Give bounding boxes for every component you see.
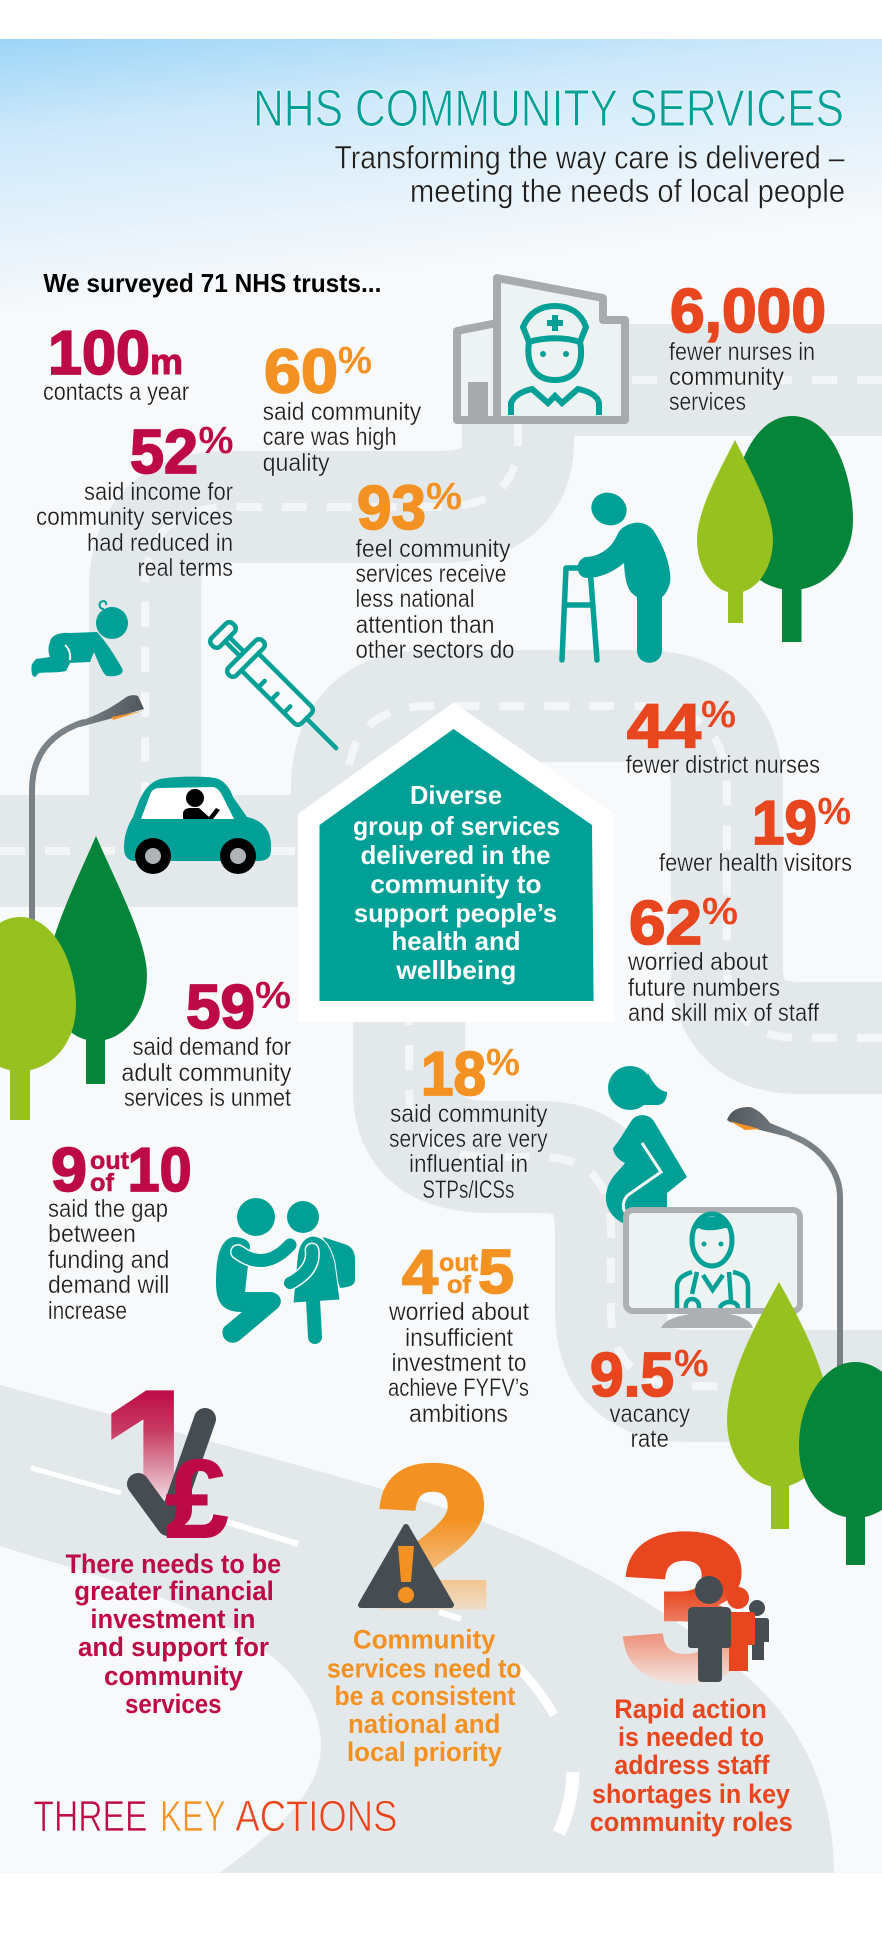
central house panel: delivered in the — [360, 840, 550, 870]
stat: 44% fewer district nurses: fewer district nurses — [626, 751, 820, 779]
stat: 60% high quality: said community — [263, 398, 422, 426]
icon: trees left — [0, 836, 147, 1120]
action 3: staff shortages text: shortages in key — [592, 1779, 790, 1809]
stat: 62% worried about staff — [627, 889, 819, 1027]
stat: 19% fewer health visitors: fewer health visitors — [659, 849, 852, 877]
stat: 6,000 fewer nurses: services — [669, 388, 746, 416]
large bottom road — [0, 1385, 834, 1873]
stat: 6,000 fewer nurses: fewer nurses in — [669, 338, 815, 366]
stat: 6,000 fewer nurses — [669, 277, 826, 416]
stat: 18% very influential: 18 — [421, 1040, 486, 1109]
stat: 59% demand unmet: % — [255, 975, 291, 1017]
icon: trees bottom right — [727, 1282, 882, 1565]
stat: 9.5% vacancy rate: vacancy — [610, 1400, 690, 1428]
stat: 19% fewer health visitors: 19 — [752, 789, 817, 858]
stat: 52% income reduced — [36, 418, 234, 582]
action 1: financial investment text: investment in — [90, 1604, 255, 1634]
stat: 52% income reduced: % — [198, 420, 234, 462]
stat: 6,000 fewer nurses: 6,000 — [670, 277, 826, 346]
icon: syringe — [202, 614, 353, 765]
icon: doctor on monitor — [626, 1210, 800, 1328]
central house panel: Diverse — [410, 780, 502, 810]
heading: three key actions: ACTIONS — [235, 1792, 397, 1841]
central house panel — [298, 702, 615, 1022]
central house panel: support people’s — [354, 898, 557, 928]
stat: 19% fewer health visitors: % — [818, 791, 851, 833]
stat: 9 out of 10: demand will — [48, 1271, 169, 1299]
stat: 100m contacts — [43, 319, 189, 406]
stat: 4 out of 5: worried about — [388, 1298, 529, 1326]
stat: 59% demand unmet: services is unmet — [124, 1084, 291, 1112]
action 1: large number with tick and pound: £ — [166, 1438, 228, 1561]
stat: 59% demand unmet: 59 — [186, 973, 255, 1042]
stat: 4 out of 5: 5 — [478, 1238, 514, 1307]
stat: 9 out of 10: out — [90, 1147, 130, 1175]
stat: 62% worried about staff: 62 — [629, 889, 702, 958]
stat: 93% less attention — [356, 474, 514, 664]
icon: car with driver — [124, 777, 271, 874]
icon: crawling baby — [31, 601, 128, 677]
stat: 44% fewer district nurses — [626, 692, 820, 779]
stat: 9 out of 10 — [48, 1136, 192, 1325]
central house panel: health and — [392, 926, 520, 956]
stat: 60% high quality: % — [338, 340, 372, 382]
action 3: staff shortages text: community roles — [590, 1807, 793, 1837]
action 2: large number with warning triangle: 2 — [375, 1426, 491, 1649]
action 1: large number with tick and pound: 1 — [100, 1350, 208, 1573]
heading: three key actions: KEY — [160, 1792, 226, 1841]
stat: 60% high quality: quality — [263, 449, 330, 477]
stat: 93% less attention: attention than — [356, 611, 494, 639]
central house panel: group of services — [353, 811, 560, 841]
stat: 9 out of 10: 9 — [51, 1136, 87, 1205]
stat: 4 out of 5: achieve FYFV’s — [388, 1374, 529, 1402]
stat: 62% worried about staff: worried about — [627, 948, 768, 976]
stat: 9 out of 10: said the gap — [48, 1195, 168, 1223]
stat: 9.5% vacancy rate: % — [674, 1343, 709, 1385]
action 1: financial investment text: greater financial — [74, 1576, 274, 1606]
stat: 19% fewer health visitors — [659, 789, 852, 877]
action 3: staff shortages text: address staff — [614, 1750, 770, 1780]
icon: adult kneeling with child — [216, 1198, 355, 1343]
stat: 6,000 fewer nurses: community — [669, 363, 784, 391]
stat: 4 out of 5: of — [447, 1271, 472, 1299]
stat: 9 out of 10: increase — [48, 1297, 127, 1325]
stat: 9.5% vacancy rate: 9.5 — [590, 1341, 674, 1410]
action 1: financial investment text — [66, 1549, 281, 1719]
stat: 52% income reduced: said income for — [84, 478, 233, 506]
stat: 18% very influential — [389, 1040, 548, 1204]
stat: 18% very influential: services are very — [389, 1125, 548, 1153]
stat: 4 out of 5: 4 — [402, 1238, 439, 1307]
stat: 9 out of 10: of — [90, 1169, 115, 1197]
stat: 44% fewer district nurses: % — [701, 694, 736, 736]
stat: 4 out of 5: ambitions — [409, 1400, 508, 1428]
stat: 44% fewer district nurses: 44 — [627, 692, 702, 761]
action 1: financial investment text: community — [104, 1661, 243, 1691]
stat: 4 out of 5: out — [439, 1249, 479, 1277]
stat: 18% very influential: influential in — [409, 1150, 528, 1178]
stat: 100m contacts: contacts a year — [43, 378, 189, 406]
action 1: financial investment text: services — [125, 1689, 222, 1719]
stat: 93% less attention: other sectors do — [356, 636, 514, 664]
stat: 60% high quality: care was high — [263, 423, 397, 451]
subtitle: meeting the needs of local people — [410, 173, 845, 209]
stat: 9 out of 10: funding and — [48, 1246, 169, 1274]
icon: older person with walking frame — [562, 487, 670, 663]
stat: 52% income reduced: community services — [36, 503, 233, 531]
stat: 9.5% vacancy rate: rate — [630, 1425, 669, 1453]
stat: 93% less attention: % — [426, 476, 462, 518]
stat: 18% very influential: said community — [390, 1100, 548, 1128]
stat: 59% demand unmet: adult community — [121, 1059, 292, 1087]
action 3: staff shortages text — [590, 1694, 793, 1837]
central house panel: community to — [370, 869, 541, 899]
action 1: financial investment text: and support for — [78, 1632, 269, 1662]
action 2: national priority text: national and — [348, 1709, 500, 1739]
stat: 4 out of 5: investment to — [392, 1349, 526, 1377]
action 2: national priority text: local priority — [347, 1737, 502, 1767]
stat: 93% less attention: feel community — [356, 535, 511, 563]
stat: 18% very influential: % — [486, 1042, 520, 1084]
heading: three key actions: THREE — [33, 1792, 147, 1841]
stat: 93% less attention: less national — [356, 585, 474, 613]
stat: 9.5% vacancy rate — [590, 1341, 709, 1453]
action 3: staff shortages text: is needed to — [618, 1722, 764, 1752]
winding community roads — [0, 380, 882, 1386]
stat: 93% less attention: services receive — [356, 560, 506, 588]
stat: 9 out of 10: 10 — [128, 1136, 192, 1205]
stat: 59% demand unmet — [121, 973, 292, 1112]
action 2: national priority text: Community — [353, 1625, 496, 1655]
stat: 52% income reduced: real terms — [138, 554, 233, 582]
action 1: financial investment text: There needs to be — [66, 1549, 281, 1579]
stat: 59% demand unmet: said demand for — [132, 1033, 291, 1061]
action 2: national priority text: services need to — [327, 1654, 522, 1684]
central house panel: wellbeing — [395, 955, 516, 985]
stat: 100m contacts: m — [150, 341, 183, 382]
stat: 93% less attention: 93 — [357, 474, 426, 543]
stat: 100m contacts: 100 — [48, 319, 150, 388]
icon: left street lamp — [32, 695, 144, 925]
stat: 9 out of 10: between — [48, 1220, 136, 1248]
stat: 4 out of 5 — [388, 1238, 529, 1428]
stat: 62% worried about staff: and skill mix of staff — [628, 999, 819, 1027]
stat: 60% high quality — [263, 338, 422, 477]
stat: 52% income reduced: had reduced in — [87, 529, 233, 557]
icon: trees top right — [697, 416, 853, 642]
heading: three key actions — [33, 1792, 397, 1841]
stat: 60% high quality: 60 — [264, 338, 338, 407]
stat: 62% worried about staff: future numbers — [628, 974, 780, 1002]
action 2: national priority text — [327, 1625, 522, 1767]
icon: right street lamp — [727, 1107, 840, 1375]
action 3: staff shortages text: Rapid action — [614, 1694, 767, 1724]
stat: 4 out of 5: insufficient — [405, 1324, 513, 1352]
stat: 18% very influential: STPs/ICSs — [422, 1176, 514, 1204]
subtitle — [334, 140, 845, 209]
action 3: large number with people: 3 — [622, 1493, 750, 1722]
icon: pregnant woman — [606, 1066, 687, 1223]
stat: 62% worried about staff: % — [702, 891, 738, 933]
stat: 52% income reduced: 52 — [130, 418, 198, 487]
icon: nurse in building — [457, 278, 625, 420]
survey heading: We surveyed 71 NHS trusts... — [43, 268, 381, 298]
action 2: national priority text: be a consistent — [334, 1681, 516, 1711]
